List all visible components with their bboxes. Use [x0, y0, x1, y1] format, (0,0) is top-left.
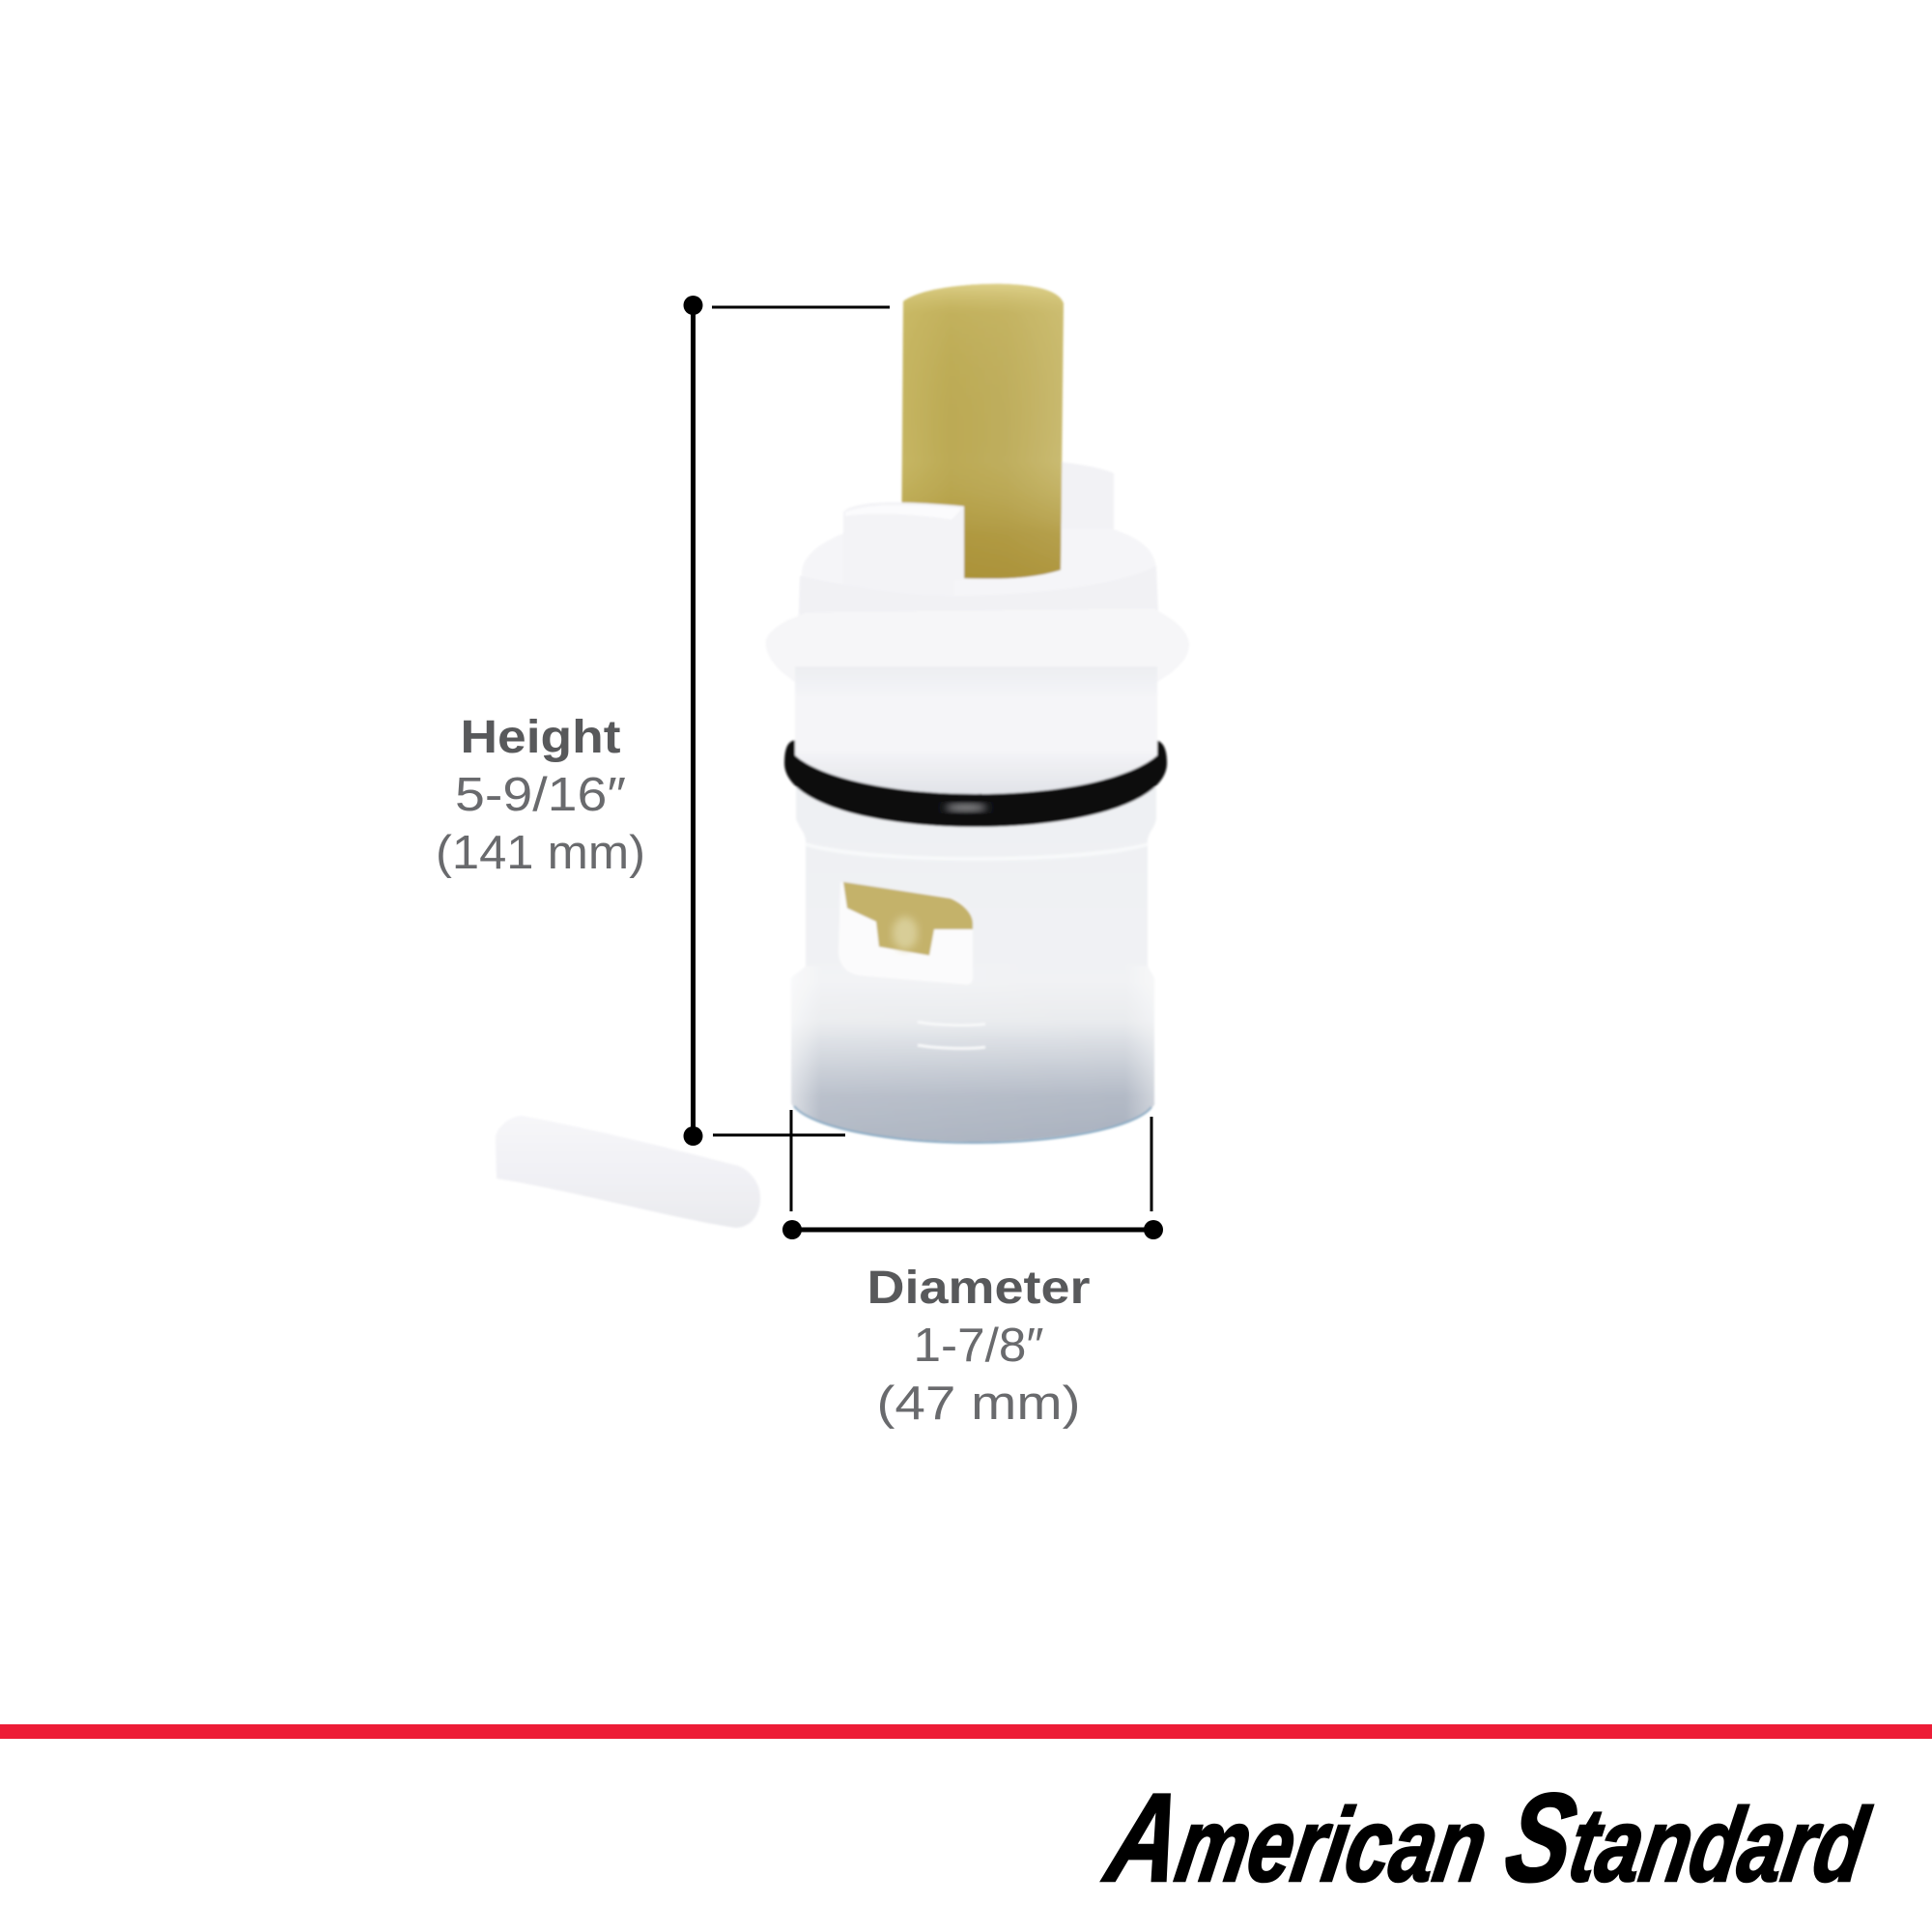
o-ring	[784, 740, 1167, 827]
brass stem	[901, 284, 1064, 579]
dimension: height	[684, 296, 890, 1146]
window opening	[838, 882, 973, 984]
flange	[766, 609, 1189, 697]
back tab	[1059, 462, 1114, 560]
collar top surface	[802, 529, 1156, 628]
label: diameter: 1-7/8″	[914, 1320, 1043, 1372]
lower body	[791, 787, 1156, 1143]
label: height: Height	[460, 712, 621, 763]
label: diameter: (47 mm)	[877, 1378, 1080, 1430]
front tab	[843, 502, 964, 597]
label: height: (141 mm)	[436, 827, 645, 879]
collar front wall	[798, 566, 1159, 638]
brass seen through window	[843, 882, 973, 955]
label: height: 5-9/16″	[455, 769, 626, 821]
label: diameter	[867, 1263, 1090, 1430]
label: height	[436, 712, 645, 879]
upper body	[795, 667, 1157, 794]
label: diameter: Diameter	[867, 1263, 1090, 1314]
dimension: diameter	[782, 1110, 1163, 1239]
loose white pin	[496, 1116, 760, 1228]
product: faucet valve cartridge	[766, 284, 1189, 1143]
tab top highlight	[845, 505, 962, 520]
red divider bar	[0, 1724, 1932, 1739]
